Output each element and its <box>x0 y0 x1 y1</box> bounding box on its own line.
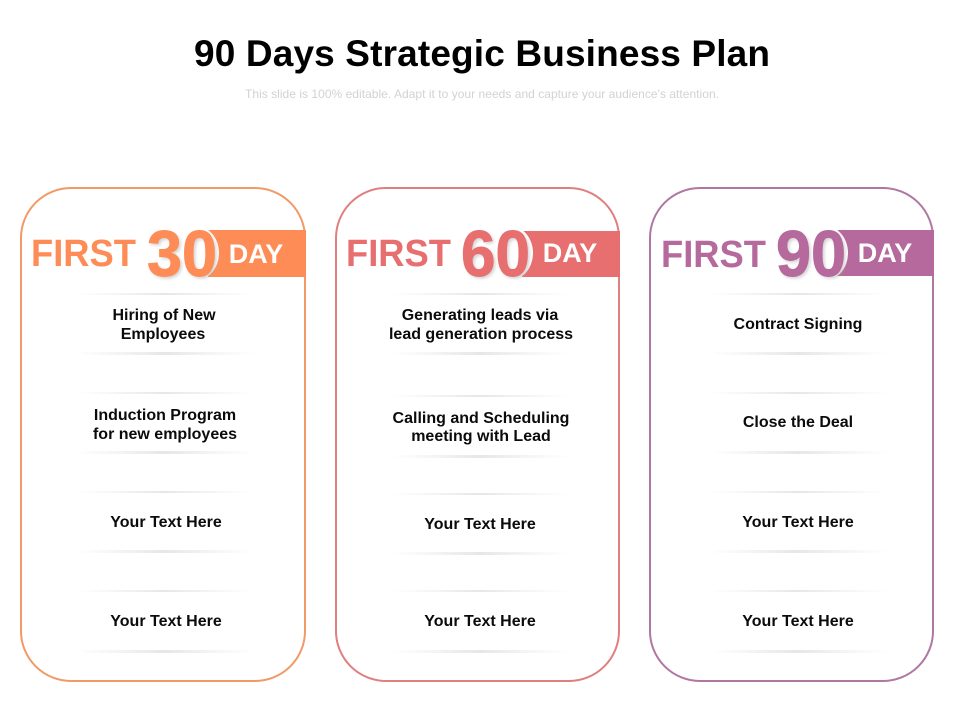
number ornament 30: 30 <box>147 217 217 290</box>
item 2 of 30: Induction Program <box>94 407 236 424</box>
item 2 of 30: for new employees <box>93 426 237 443</box>
item 2 of 90 <box>708 392 888 454</box>
heading word FIRST 90: FIRST <box>661 234 766 276</box>
panel: first 90 days <box>650 188 934 681</box>
item 1 of 30: Hiring of New <box>112 307 216 324</box>
heading word FIRST 60: FIRST <box>346 233 451 275</box>
title: 90 Days Strategic Business Plan <box>194 33 770 74</box>
item 4 of 90: Your Text Here <box>742 613 854 630</box>
label DAY 60: DAY <box>543 238 597 268</box>
label DAY 90: DAY <box>858 238 912 268</box>
item 3 of 60 <box>390 493 570 555</box>
item 1 of 30: Employees <box>121 326 205 343</box>
ribbon 90 <box>836 230 934 276</box>
item 4 of 60: Your Text Here <box>424 613 536 630</box>
heading word FIRST 30: FIRST <box>31 233 136 275</box>
panel outline 90 <box>650 188 933 681</box>
item 1 of 60: Generating leads via <box>402 307 558 324</box>
item 3 of 60: Your Text Here <box>424 516 536 533</box>
panel: first 30 days <box>21 188 306 681</box>
panel outline 60 <box>336 188 619 681</box>
item 3 of 30 <box>75 491 255 553</box>
number ornament 90: 90 <box>776 217 846 290</box>
item 3 of 90 <box>708 491 888 553</box>
number ornament 30: 30 <box>149 219 219 292</box>
panel outline 30 <box>21 188 305 681</box>
item 2 of 60: Calling and Scheduling <box>393 410 569 427</box>
item 1 of 30 <box>75 293 255 355</box>
item 3 of 30: Your Text Here <box>110 514 222 531</box>
number ornament 60: 60 <box>461 217 530 290</box>
label DAY 30: DAY <box>229 239 283 269</box>
item 1 of 60 <box>389 293 573 355</box>
item 2 of 90: Close the Deal <box>743 414 853 431</box>
ribbon 30 <box>208 230 306 277</box>
item 4 of 90 <box>708 590 888 653</box>
panel: first 60 days <box>336 188 620 681</box>
item 4 of 60 <box>390 590 570 653</box>
item 1 of 90 <box>708 293 888 355</box>
number ornament 60: 60 <box>463 219 532 292</box>
item 4 of 30: Your Text Here <box>110 613 222 630</box>
ribbon 60 <box>522 231 620 277</box>
number ornament 90: 90 <box>778 219 848 292</box>
item 4 of 30 <box>75 590 255 653</box>
item 2 of 60: meeting with Lead <box>411 428 551 445</box>
item 1 of 60: lead generation process <box>389 326 573 343</box>
item 3 of 90: Your Text Here <box>742 514 854 531</box>
item 1 of 90: Contract Signing <box>734 316 862 333</box>
item 2 of 60 <box>390 395 570 458</box>
subtitle: This slide is 100% editable. Adapt it to your needs and capture your audience's attention. <box>245 87 719 101</box>
item 2 of 30 <box>75 392 255 454</box>
